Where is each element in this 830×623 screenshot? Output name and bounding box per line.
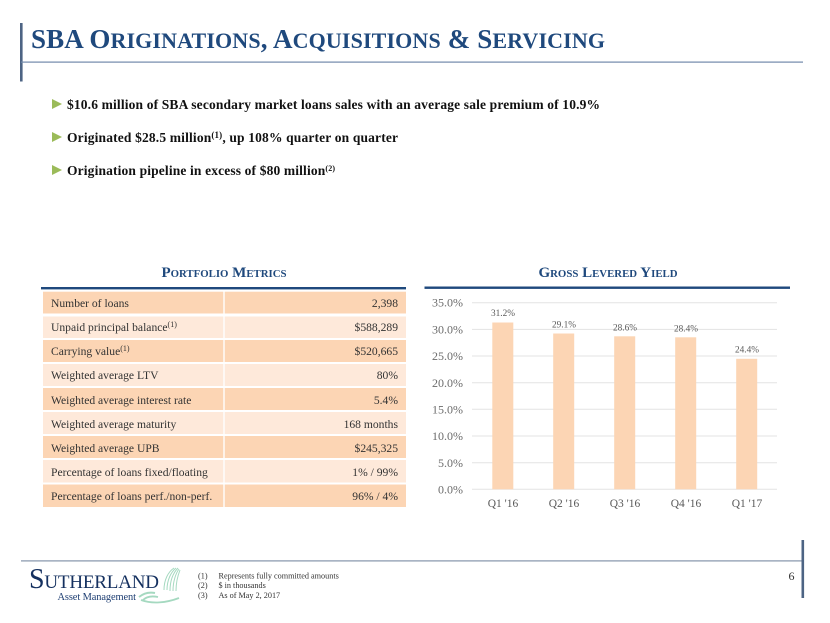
bar chart (432, 296, 777, 510)
y axis labels (432, 296, 463, 496)
footnotes: (3) (198, 591, 208, 600)
x axis labels: Q4 '16 (671, 498, 701, 510)
x axis labels: Q1 '17 (732, 498, 762, 510)
title: SBA ORIGINATIONS, ACQUISITIONS & SERVICING (31, 24, 605, 54)
row: perf/non-perf: 96% / 4% (352, 490, 398, 503)
row: number of loans: 2,398 (372, 297, 398, 310)
x axis labels: Q2 '16 (549, 498, 579, 510)
row: carrying value (51, 344, 398, 358)
heading rule (424, 286, 790, 289)
x axis labels: Q1 '16 (488, 498, 518, 510)
row: carrying value: $520,665 (355, 345, 398, 358)
bullet 2: , up 108% quarter on quarter (222, 130, 398, 145)
y axis labels: 10.0% (432, 429, 463, 443)
y axis labels: 5.0% (438, 456, 463, 470)
bullet 2 (52, 130, 398, 145)
logo wordmark: SUTHERLAND (29, 564, 159, 595)
bars (492, 322, 757, 489)
x axis labels: Q3 '16 (610, 498, 640, 510)
y axis labels: 30.0% (432, 322, 463, 336)
bullet 3: Origination pipeline in excess of $80 million (67, 163, 325, 178)
panel: portfolio metrics (41, 265, 406, 507)
page number: 6 (788, 569, 794, 583)
row: weighted average interest rate: 5.4% (374, 394, 398, 407)
x axis labels (488, 498, 762, 510)
row: carrying value: (1) (120, 344, 130, 353)
bullet 1: $10.6 million of SBA secondary market loans sales with an average sale premium of 10.9% (67, 97, 600, 112)
row: weighted average interest rate (51, 394, 398, 407)
footnotes: Represents fully committed amounts (218, 572, 339, 580)
row: weighted average maturity (51, 418, 398, 431)
row: fixed/floating (51, 466, 398, 479)
row: number of loans (51, 297, 398, 310)
row: perf/non-perf (51, 490, 398, 503)
row: weighted average UPB (51, 442, 398, 455)
data labels: 24.4% (735, 346, 759, 356)
row: weighted average UPB: $245,325 (355, 442, 398, 455)
logo tagline: Asset Management (58, 592, 136, 603)
row: weighted average LTV (51, 369, 398, 382)
row: weighted average interest rate: Weighted average interest rate (51, 394, 191, 407)
row: unpaid principal balance: Unpaid principal balance (51, 321, 168, 334)
row: fixed/floating: Percentage of loans fixed/floating (51, 466, 208, 479)
row: weighted average maturity: 168 months (344, 418, 398, 431)
data labels: 28.4% (674, 324, 698, 334)
table backgrounds (43, 291, 406, 507)
bullet 2: Originated $28.5 million (67, 130, 211, 145)
header rules (20, 23, 803, 82)
data labels (491, 309, 759, 356)
bullet 2: (1) (211, 130, 222, 140)
y axis labels: 0.0% (438, 482, 463, 496)
footnotes: (1) (198, 572, 208, 580)
y axis labels: 20.0% (432, 376, 463, 390)
row: unpaid principal balance (51, 320, 398, 334)
heading rule (41, 287, 406, 289)
row: weighted average UPB: Weighted average UPB (51, 442, 160, 455)
data labels: 31.2% (491, 309, 515, 319)
logo willow mark (139, 568, 180, 602)
row: weighted average LTV: 80% (377, 369, 398, 382)
data labels: 28.6% (613, 324, 637, 334)
row: number of loans: Number of loans (51, 297, 129, 310)
row: carrying value: Carrying value (51, 345, 120, 358)
data labels: 29.1% (552, 320, 576, 330)
y axis labels: 25.0% (432, 349, 463, 363)
y axis labels: 35.0% (432, 296, 463, 310)
row: fixed/floating: 1% / 99% (352, 466, 398, 479)
footnotes: (2) (198, 581, 208, 590)
footnotes (198, 572, 339, 600)
heading: gross levered yield: GROSS LEVERED YIELD (538, 265, 678, 281)
bullet list (52, 97, 600, 178)
logo: Sutherland Asset Management (29, 564, 180, 603)
footnotes: As of May 2, 2017 (218, 591, 280, 600)
row: weighted average LTV: Weighted average LTV (51, 369, 159, 382)
row: perf/non-perf: Percentage of loans perf./non-perf. (51, 490, 212, 503)
footer rules (21, 540, 804, 598)
bullet 3: (2) (325, 164, 335, 173)
row: unpaid principal balance: $588,289 (355, 321, 398, 334)
heading: portfolio metrics: PORTFOLIO METRICS (161, 265, 287, 281)
panel: gross levered yield (424, 265, 790, 510)
row: weighted average maturity: Weighted average maturity (51, 418, 176, 431)
footnotes: $ in thousands (218, 581, 266, 590)
row: unpaid principal balance: (1) (168, 320, 177, 329)
y axis labels: 15.0% (432, 402, 463, 416)
